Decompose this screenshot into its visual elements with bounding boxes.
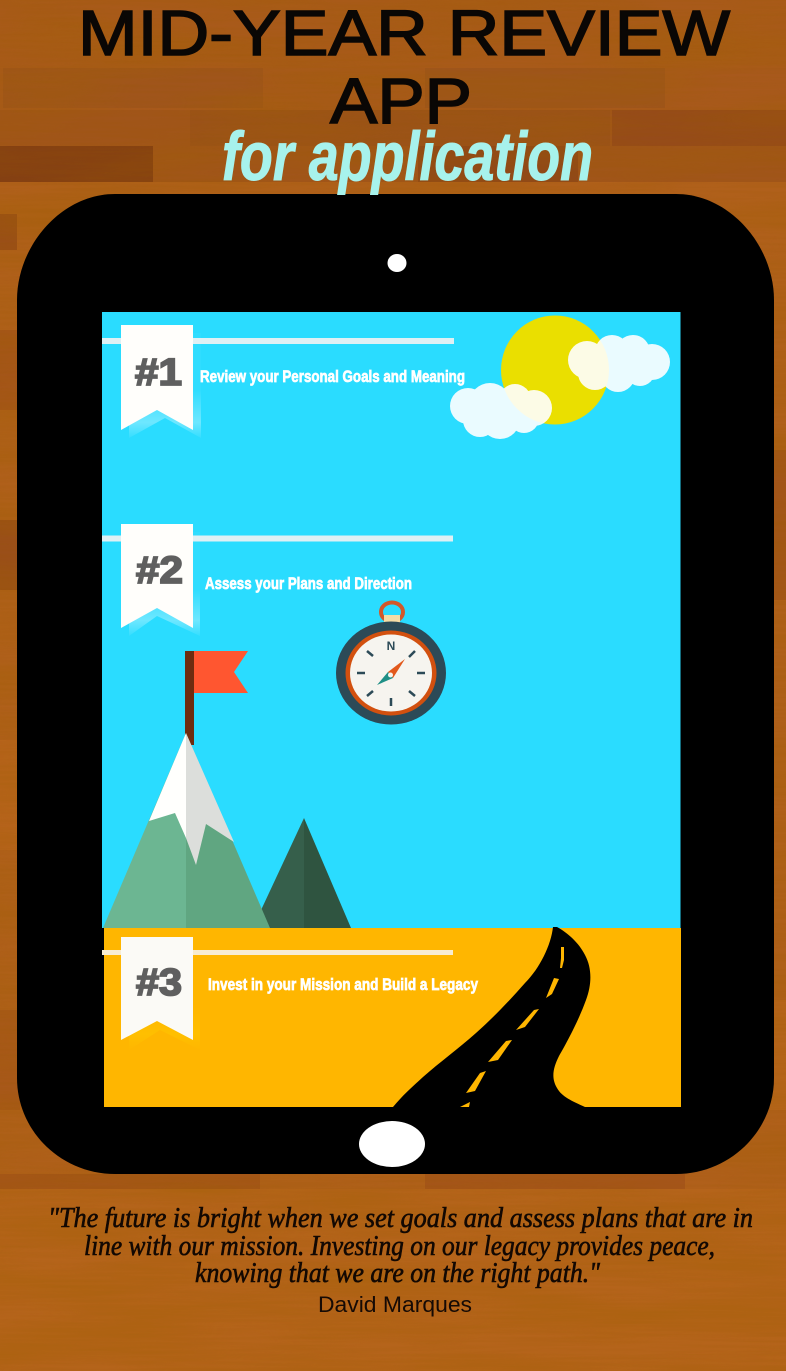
flag <box>185 651 248 745</box>
step 2 rule <box>102 536 453 542</box>
step 3 rule <box>102 950 453 955</box>
title: APP <box>330 65 472 137</box>
compass needle <box>388 659 405 678</box>
tablet body <box>17 194 774 1174</box>
dark mountain <box>255 818 351 928</box>
orange ground <box>104 928 681 1107</box>
compass marks <box>357 651 425 706</box>
step 3 ribbon shadow <box>129 945 200 1050</box>
quote: line with our mission. Investing on our legacy provides peace, <box>84 1231 715 1262</box>
compass loop <box>381 602 403 622</box>
step 3 label: Invest in your Mission and Build a Legacy <box>208 976 479 994</box>
compass case <box>336 622 446 724</box>
sun <box>501 316 609 424</box>
step 1 label: Review your Personal Goals and Meaning <box>200 368 465 386</box>
subtitle: for application <box>222 118 593 195</box>
compass north letter: N <box>387 639 395 653</box>
compass <box>336 602 446 724</box>
tablet camera <box>388 254 406 272</box>
step 1 <box>102 325 465 438</box>
step 2 number: #2 <box>136 550 183 592</box>
quote <box>48 1203 753 1289</box>
cloud right <box>568 335 670 392</box>
step 1 rule <box>102 338 454 344</box>
step 3 <box>102 937 479 1050</box>
step 3 number: #3 <box>136 962 182 1004</box>
step 3 ribbon <box>121 937 193 1040</box>
tablet screen sky <box>102 312 680 928</box>
quote author: David Marques <box>318 1292 472 1317</box>
step 2 ribbon <box>121 524 193 628</box>
step 2 ribbon shadow <box>129 532 200 636</box>
quote: "The future is bright when we set goals and assess plans that are in <box>48 1203 753 1234</box>
step 1 ribbon shadow <box>129 333 201 438</box>
road centre dashes <box>460 947 564 1107</box>
step 2 <box>102 524 453 636</box>
tablet home button <box>359 1121 425 1167</box>
step 1 ribbon <box>121 325 193 430</box>
title <box>78 0 731 137</box>
cloud left <box>450 383 552 439</box>
large mountain <box>103 733 270 928</box>
quote: knowing that we are on the right path." <box>195 1258 600 1289</box>
road <box>393 927 590 1107</box>
step 2 label: Assess your Plans and Direction <box>205 575 412 593</box>
step 1 number: #1 <box>135 352 182 394</box>
